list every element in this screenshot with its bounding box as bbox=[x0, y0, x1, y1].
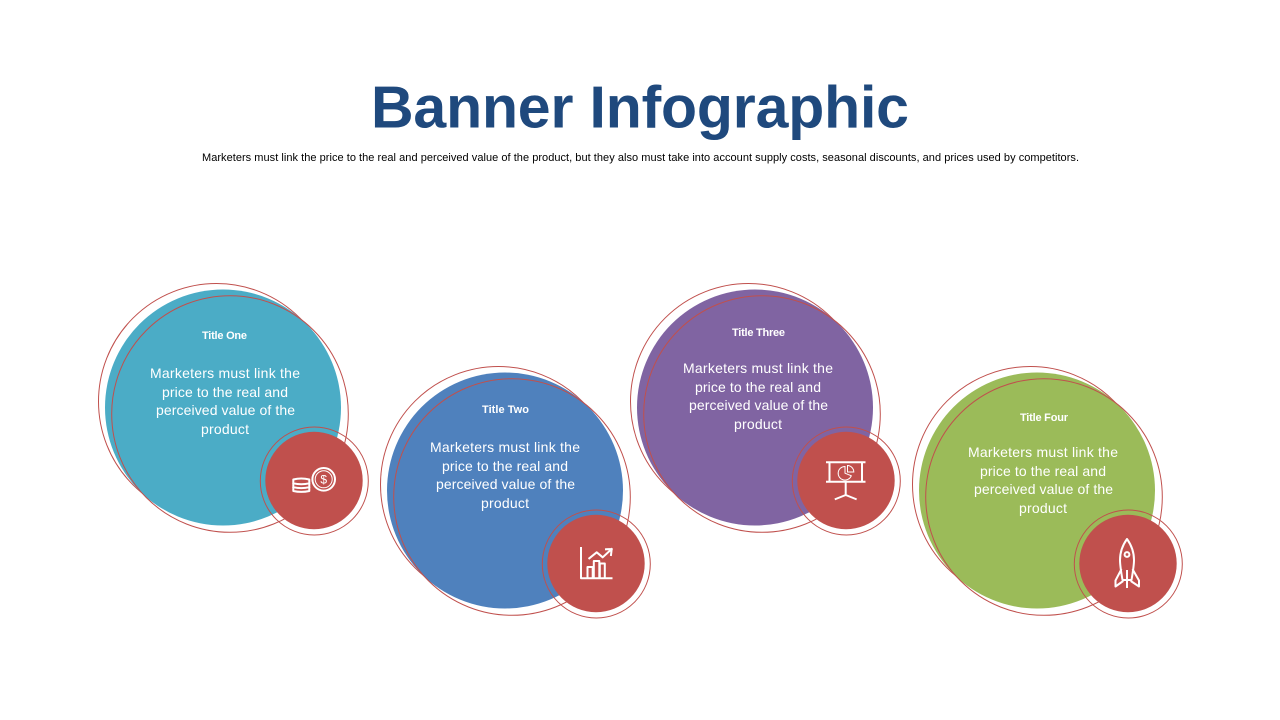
icon badge: bar chart bbox=[542, 510, 650, 618]
text block: title one: product bbox=[201, 421, 249, 437]
heading: title one: Title One bbox=[202, 330, 247, 342]
text block: title four: perceived value of the bbox=[974, 481, 1113, 497]
text block: title one: price to the real and bbox=[162, 384, 288, 400]
text block: title one bbox=[150, 365, 300, 437]
text block: title three: price to the real and bbox=[695, 379, 821, 395]
text block: title four: price to the real and bbox=[980, 463, 1106, 479]
text block: title four: product bbox=[1019, 500, 1067, 516]
heading: title four: Title Four bbox=[1020, 412, 1069, 424]
panel: title four bbox=[912, 366, 1182, 618]
text block: title two: product bbox=[481, 495, 529, 511]
icon badge: presentation board bbox=[792, 427, 900, 535]
text block: title four bbox=[968, 444, 1118, 516]
icon badge: coins bbox=[260, 427, 368, 535]
icon badge: rocket bbox=[1074, 510, 1182, 618]
icon badge: coins: $ bbox=[320, 472, 327, 486]
heading: title three: Title Three bbox=[732, 327, 785, 339]
text block: title one: Marketers must link the bbox=[150, 365, 300, 381]
panel: title three bbox=[630, 284, 900, 535]
text block: title one: perceived value of the bbox=[156, 402, 295, 418]
text block: title two: Marketers must link the bbox=[430, 439, 580, 455]
text block: title two: price to the real and bbox=[442, 458, 568, 474]
text block: title three: product bbox=[734, 416, 782, 432]
title: Banner Infographic bbox=[371, 74, 909, 140]
text block: title three: Marketers must link the bbox=[683, 360, 833, 376]
text block: title three: perceived value of the bbox=[689, 397, 828, 413]
text block: title two bbox=[430, 439, 580, 511]
text block: title four: Marketers must link the bbox=[968, 444, 1118, 460]
subtitle: Marketers must link the price to the real and perceived value of the product, but they also must take into account supply costs, seasonal discounts, and prices used by competitors. bbox=[202, 152, 1079, 164]
panel: title one bbox=[98, 284, 368, 535]
text block: title three bbox=[683, 360, 833, 432]
text block: title two: perceived value of the bbox=[436, 476, 575, 492]
panel: title two bbox=[380, 366, 650, 618]
heading: title two: Title Two bbox=[482, 404, 529, 416]
